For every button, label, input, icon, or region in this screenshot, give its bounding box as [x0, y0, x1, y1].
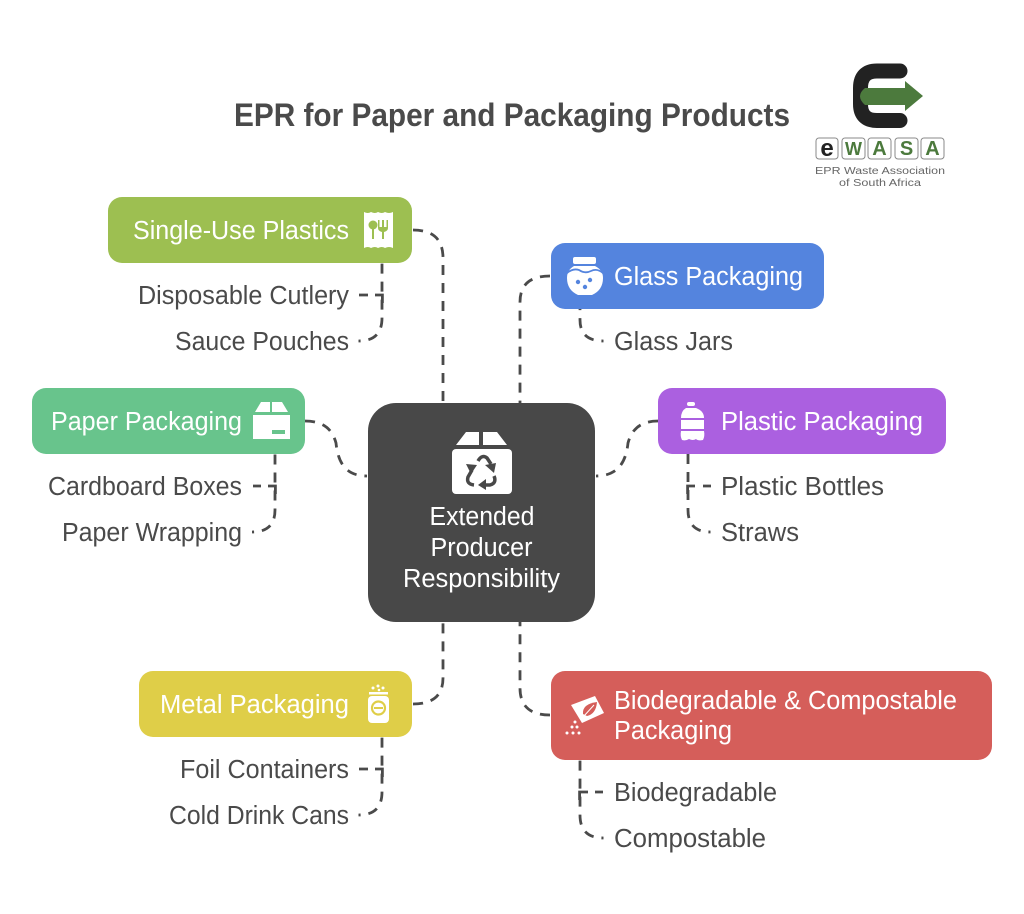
item: Plastic Bottles: Plastic Bottles	[721, 473, 884, 501]
connectors: Biodegradable items	[580, 760, 604, 838]
panel: Single-Use Plastics: Single-Use Plastics	[133, 217, 349, 245]
item: Disposable Cutlery: Disposable Cutlery	[138, 282, 349, 310]
connectors: Paper items	[252, 454, 275, 532]
item: Biodegradable: Biodegradable	[614, 779, 777, 807]
label: centre: Responsibility	[403, 565, 560, 593]
panel: centre node	[368, 403, 595, 622]
connectors: Single-Use Plastics items	[358, 263, 382, 341]
item: Paper Wrapping: Paper Wrapping	[62, 519, 242, 547]
item: Sauce Pouches: Sauce Pouches	[175, 328, 349, 356]
label: centre: Extended	[430, 503, 534, 531]
item: Cardboard Boxes: Cardboard Boxes	[48, 473, 242, 501]
logo: eWASA: of South Africa	[839, 178, 922, 189]
panel: Metal Packaging	[139, 671, 412, 737]
item: Straws: Straws	[721, 519, 799, 547]
connectors: Plastic items	[688, 454, 711, 532]
panel: Biodegradable and Compostable Packaging	[551, 671, 992, 760]
label: centre	[403, 503, 560, 593]
label: centre: Producer	[430, 534, 533, 562]
icon: plastic bottle	[681, 402, 704, 440]
logo: eWASA: EPR Waste Association	[815, 166, 945, 177]
panel: Single-Use Plastics	[108, 197, 412, 263]
item: Glass Jars: Glass Jars	[614, 328, 733, 356]
logo: eWASA: A	[925, 138, 940, 160]
connector: centre to Glass Packaging	[520, 276, 550, 403]
icon: cutlery packet	[364, 212, 393, 248]
icon: compostable packet	[566, 696, 604, 734]
panel: Biodegradable and Compostable Packaging: Biodegradable & Compostable	[614, 687, 957, 715]
panel: Biodegradable and Compostable Packaging: Packaging	[614, 717, 732, 745]
panel: Metal Packaging: Metal Packaging	[160, 691, 349, 719]
connector: centre to Plastic Packaging	[596, 421, 658, 476]
icon: metal can	[368, 684, 389, 723]
connector: centre to Single-Use Plastics	[413, 230, 443, 403]
connectors: Metal items	[358, 737, 382, 815]
panel: Plastic Packaging: Plastic Packaging	[721, 408, 923, 436]
title: EPR for Paper and Packaging Products	[234, 97, 790, 133]
connector: centre to Metal Packaging	[413, 622, 443, 704]
logo: eWASA: W	[845, 139, 862, 159]
icon: cardboard box	[253, 402, 290, 439]
logo: eWASA	[815, 71, 945, 189]
item: Compostable: Compostable	[614, 825, 766, 853]
logo: eWASA: A	[872, 138, 887, 160]
icon: glass jar	[567, 257, 603, 295]
logo: eWASA: e	[820, 135, 834, 162]
icon: recycling box	[452, 432, 512, 494]
item: Cold Drink Cans: Cold Drink Cans	[169, 802, 349, 830]
panel: Glass Packaging: Glass Packaging	[614, 263, 803, 291]
connectors: Glass items	[580, 309, 604, 341]
panel: Glass Packaging	[551, 243, 824, 309]
logo: eWASA: S	[900, 138, 913, 160]
panel: Plastic Packaging	[658, 388, 946, 454]
panel: Paper Packaging: Paper Packaging	[51, 408, 242, 436]
connector: centre to Paper Packaging	[305, 421, 367, 476]
panel: Paper Packaging	[32, 388, 305, 454]
item: Foil Containers: Foil Containers	[180, 756, 349, 784]
connector: centre to Biodegradable	[520, 622, 550, 715]
